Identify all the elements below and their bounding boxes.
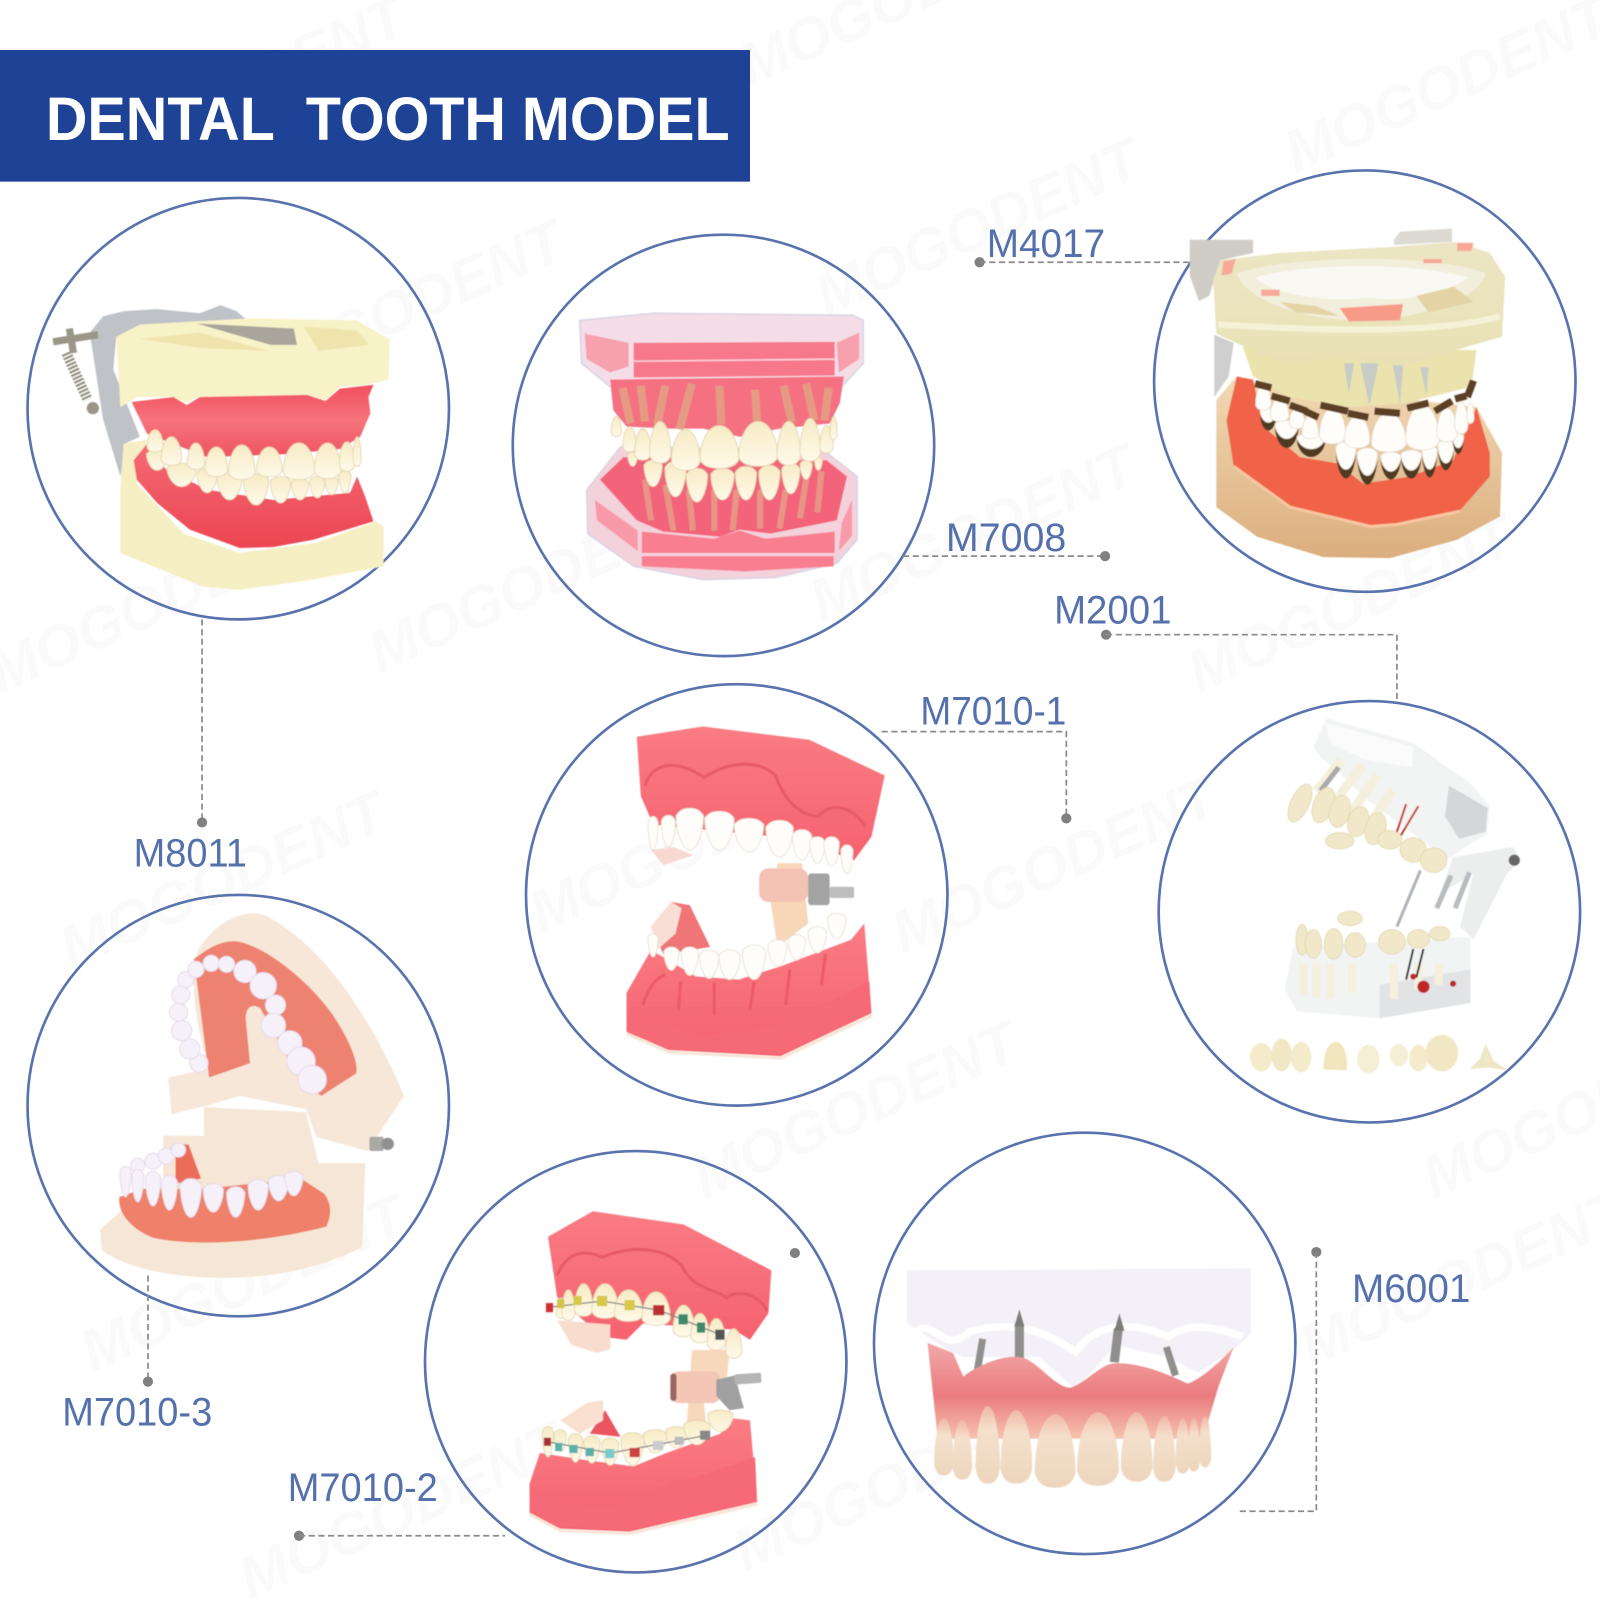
callout: M7008: M7008: [946, 516, 1066, 560]
circle frame: [874, 1133, 1295, 1554]
circle frame: [28, 895, 449, 1316]
model illustration: [907, 1268, 1251, 1488]
panel: M2001 transparent pathology model: [1159, 701, 1580, 1122]
model illustration: [627, 727, 885, 1058]
stray marker dot: [790, 1248, 800, 1258]
callout: M7010-3: [62, 1276, 212, 1435]
callout: M7010-2: M7010-2: [288, 1466, 438, 1510]
model illustration: [1190, 229, 1505, 558]
model illustration: [530, 1211, 771, 1534]
title banner: [0, 50, 750, 182]
callout: M4017: M4017: [987, 222, 1105, 266]
callout: M6001: [1238, 1247, 1470, 1511]
callout: M2001: [1054, 588, 1397, 702]
model illustration: [580, 313, 863, 580]
callout: M8011: [134, 619, 247, 875]
circle frame: [526, 684, 947, 1106]
callout: M7010-1: M7010-1: [920, 689, 1066, 733]
model illustration: [53, 305, 390, 590]
callout: M7010-2: [288, 1466, 505, 1541]
callout: M7008: [903, 516, 1110, 561]
callout: M6001: M6001: [1352, 1267, 1470, 1311]
title: DENTAL TOOTH MODEL: [46, 85, 730, 153]
circle frame: [513, 235, 934, 656]
circle frame: [1154, 170, 1576, 592]
circle frame: [425, 1151, 846, 1572]
callout: M7010-3: M7010-3: [62, 1391, 212, 1435]
model illustration: [100, 913, 404, 1278]
panel: M7010-3 cream base model: [28, 895, 449, 1316]
callout: M2001: M2001: [1054, 588, 1171, 632]
panel: M7010-1 pink standard model: [526, 684, 947, 1106]
circle frame: [1159, 701, 1580, 1122]
panel: M4017 periodontal model: [1154, 170, 1576, 592]
brace wires: [548, 1301, 720, 1453]
panel: M6001 implant model: [874, 1133, 1295, 1554]
circle frame: [28, 198, 449, 619]
panel: M7008 clear-case model: [513, 235, 934, 656]
panel: M7010-2 braces model: [425, 1151, 846, 1572]
loose teeth: [1250, 1035, 1508, 1073]
callout: M4017: [974, 222, 1189, 267]
callout: M7010-1: [882, 689, 1071, 823]
callout: M8011: M8011: [134, 831, 247, 875]
panel: M8011 articulator model: [28, 198, 449, 619]
model illustration: [1250, 718, 1520, 1073]
